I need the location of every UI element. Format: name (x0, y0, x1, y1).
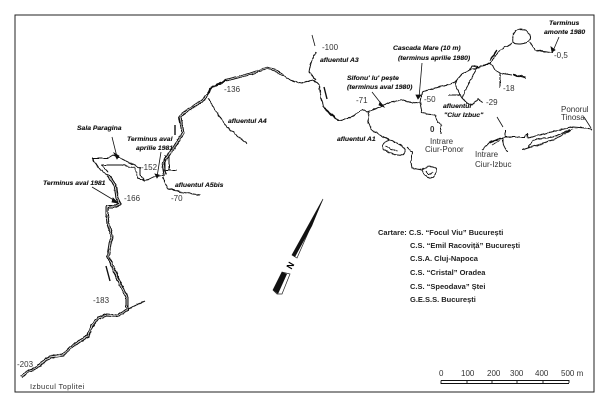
depth labels: -183 (93, 296, 110, 305)
depth labels: 0 (430, 125, 435, 134)
mapping credits: C.S.A. Cluj-Napoca (410, 254, 479, 263)
place labels: Ciur-Ponor (425, 145, 464, 154)
cave feature annotations: Sala Paragina (77, 125, 122, 132)
scale bar: 0 (439, 369, 444, 378)
cave feature annotations: (terminus aval 1980) (347, 84, 413, 91)
depth labels: -166 (124, 194, 141, 203)
upper loop (513, 29, 553, 53)
mapping credits: G.E.S.S. București (410, 295, 476, 304)
scale bar: 300 (510, 369, 524, 378)
scale bar (439, 369, 584, 384)
cave feature annotations: aprilie 1981 (136, 145, 173, 152)
place labels: Intrare (475, 150, 499, 159)
depth labels: -70 (171, 194, 183, 203)
depth labels: -136 (224, 85, 241, 94)
place labels (30, 105, 589, 391)
cave feature annotations: afluentul A1 (337, 136, 376, 143)
north arrow: N (284, 260, 296, 271)
cave feature annotations: "Ciur Izbuc" (444, 112, 484, 119)
depth labels: -203 (17, 360, 34, 369)
depth labels: -100 (322, 43, 339, 52)
place labels: Tinosa (561, 113, 585, 122)
place labels: Intrare (430, 137, 454, 146)
mapping credits: C.S. “Emil Racoviță” București (410, 241, 520, 250)
cave feature annotations: Terminus (549, 20, 580, 27)
north arrow (273, 199, 323, 294)
depth labels: -0,5 (554, 51, 568, 60)
tributary passages (128, 50, 592, 309)
mapping credits: C.S. “Speodava” Ștei (410, 282, 485, 291)
cave feature annotations: afluentul (443, 103, 471, 110)
scale bar: 400 (535, 369, 549, 378)
cave feature annotations: afluentul A4 (228, 118, 267, 125)
Sala Paragina chamber (92, 155, 165, 181)
cave feature annotations: Terminus aval (127, 136, 173, 143)
cave feature annotations: Terminus aval 1981 (43, 180, 106, 187)
depth labels: -50 (424, 95, 436, 104)
depth labels: -29 (486, 98, 498, 107)
place labels: Izbucul Toplitei (30, 382, 85, 391)
cave feature annotations: afluentul A5bis (175, 182, 224, 189)
mapping credits: C.S. “Cristal” Oradea (410, 268, 486, 277)
scale bar: 200 (487, 369, 501, 378)
afluentul A1 with chambers (368, 112, 437, 178)
cave feature annotations: Cascada Mare (10 m) (393, 45, 461, 52)
cave feature annotations: (terminus aprilie 1980) (398, 55, 471, 62)
cave feature annotations: amonte 1980 (544, 29, 585, 36)
depth labels (17, 43, 568, 369)
depth labels: -152 (141, 163, 158, 172)
scale bar: 500 m (561, 369, 584, 378)
depth labels: -71 (356, 96, 368, 105)
cave feature annotations: Sifonu' lu' pește (347, 75, 399, 82)
scale bar: 100 (461, 369, 475, 378)
cave feature annotations (43, 20, 585, 189)
main cave passage (21, 29, 553, 377)
depth labels: -18 (503, 84, 515, 93)
mapping credits (378, 228, 520, 304)
cave feature annotations: afluentul A3 (320, 57, 359, 64)
mapping credits: Cartare: C.S. “Focul Viu” București (378, 228, 503, 237)
place labels: Ponorul (561, 105, 589, 114)
place labels: Ciur-Izbuc (475, 160, 511, 169)
annotation arrows (92, 35, 591, 281)
